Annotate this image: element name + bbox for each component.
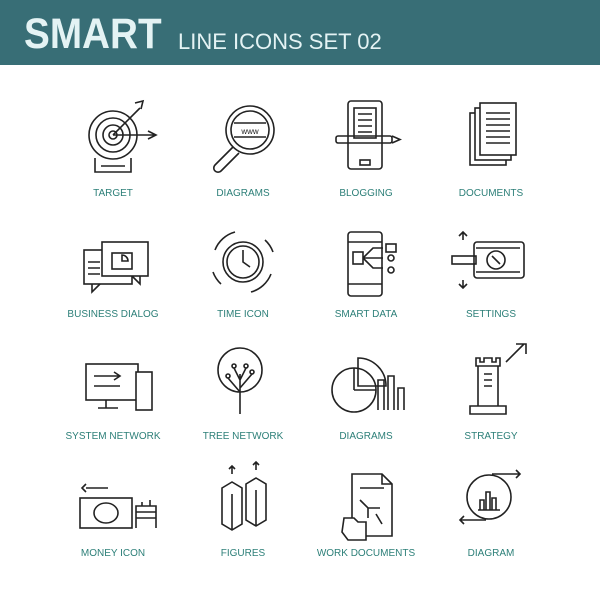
icon: tree network [218,348,262,414]
icon: magnifier www [214,106,274,172]
subtitle: LINE ICONS SET 02 [178,29,382,54]
icon: pie diagrams [332,358,404,412]
label settings: SETTINGS [466,309,516,320]
icon: money [80,484,156,528]
icon: diagram circular [460,470,520,524]
label documents: DOCUMENTS [459,188,523,199]
label diagrams: DIAGRAMS [216,188,270,199]
label diagram: DIAGRAM [468,548,514,559]
icon: magnifier www: www [240,127,259,136]
label diagrams 2: DIAGRAMS [339,431,393,442]
icon: figures [222,462,266,530]
label work documents: WORK DOCUMENTS [317,548,415,559]
label smart data: SMART DATA [335,309,397,320]
labels row 1: TARGET [93,188,133,199]
label blogging: BLOGGING [339,188,393,199]
icon: system network [86,364,152,410]
icon: strategy rook [470,344,526,414]
title: SMART: SMART [24,10,162,58]
label money icon: MONEY ICON [81,548,145,559]
label tree network: TREE NETWORK [203,431,283,442]
icon: blogging tablet [336,101,400,169]
header banner [0,0,600,65]
icon: target [89,101,156,172]
label strategy: STRATEGY [464,431,518,442]
icon: settings [452,232,524,288]
icon: work documents [342,474,392,540]
label time icon: TIME ICON [217,309,269,320]
label figures: FIGURES [221,548,265,559]
label system network: SYSTEM NETWORK [65,431,160,442]
icon: business dialog [84,242,148,292]
label business dialog: BUSINESS DIALOG [67,309,159,320]
icon: time [213,232,273,292]
icon: smart data phone [348,232,396,296]
icon: documents [470,103,516,165]
